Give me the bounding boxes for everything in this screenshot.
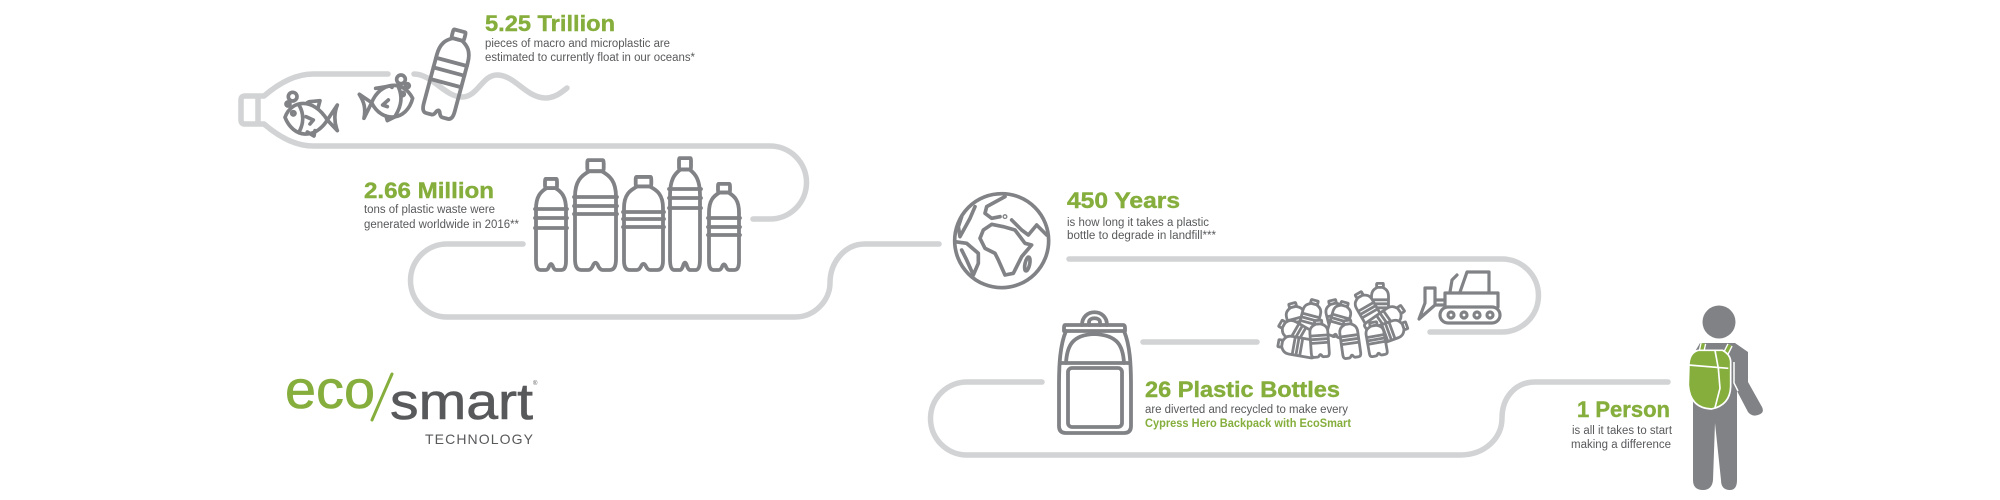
heading: 1 Person — [1577, 397, 1670, 422]
pipe: third loop — [1069, 259, 1538, 332]
stat: 450 Years: bottle to degrade in landfill*** — [1067, 230, 1217, 242]
icon: globe — [955, 194, 1049, 288]
description: are diverted and recycled to make every — [1145, 404, 1348, 416]
icon: pile of crushed bottles — [1276, 283, 1410, 359]
registered mark: ® — [533, 380, 538, 387]
stat: 26 Plastic Bottles: Cypress Hero Backpack with EcoSmart — [1145, 418, 1351, 430]
pipe: short segment — [1143, 339, 1257, 345]
logo slash — [372, 374, 392, 420]
stat: 2.66 Million: generated worldwide in 2016** — [364, 219, 520, 231]
description: tons of plastic waste were — [364, 204, 495, 216]
icon: first fish — [285, 92, 337, 136]
icon: second fish — [359, 75, 413, 121]
stat: 26 Plastic Bottles — [1145, 377, 1351, 430]
stat: 5.25 Trillion — [485, 11, 696, 64]
stat: 1 Person: making a difference — [1571, 439, 1671, 451]
heading: 26 Plastic Bottles — [1145, 377, 1340, 402]
pipe: ocean wave — [414, 74, 567, 98]
arm gap — [1734, 362, 1738, 391]
pipe: second loop — [410, 244, 939, 317]
logo word: technology: TECHNOLOGY — [425, 431, 534, 447]
person backpack — [1688, 343, 1731, 409]
description: is all it takes to start — [1572, 425, 1673, 437]
pipe: bottle outline and upper loop — [241, 74, 806, 219]
heading: 2.66 Million — [364, 178, 494, 203]
pipe: final loop — [930, 382, 1668, 455]
logo word: eco: eco — [285, 360, 375, 420]
stat: 5.25 Trillion: estimated to currently float in our oceans* — [485, 52, 696, 64]
stat: 1 Person — [1571, 397, 1673, 451]
icon: backpack — [1059, 312, 1131, 433]
logo: eco/smart technology — [285, 360, 538, 447]
icon: row of five bottles — [535, 158, 740, 270]
logo word: smart: smart — [390, 373, 533, 430]
person head — [1702, 306, 1736, 338]
stat: 450 Years — [1067, 188, 1217, 242]
heading: 5.25 Trillion — [485, 11, 615, 36]
icon: person with green backpack — [1688, 306, 1763, 490]
person body — [1690, 343, 1763, 490]
icon: tilted plastic bottle — [422, 27, 475, 120]
icon: bulldozer — [1419, 272, 1500, 323]
description: is how long it takes a plastic — [1067, 217, 1209, 229]
description: pieces of macro and microplastic are — [485, 38, 670, 50]
heading: 450 Years — [1067, 188, 1180, 213]
stat: 2.66 Million — [364, 178, 520, 231]
